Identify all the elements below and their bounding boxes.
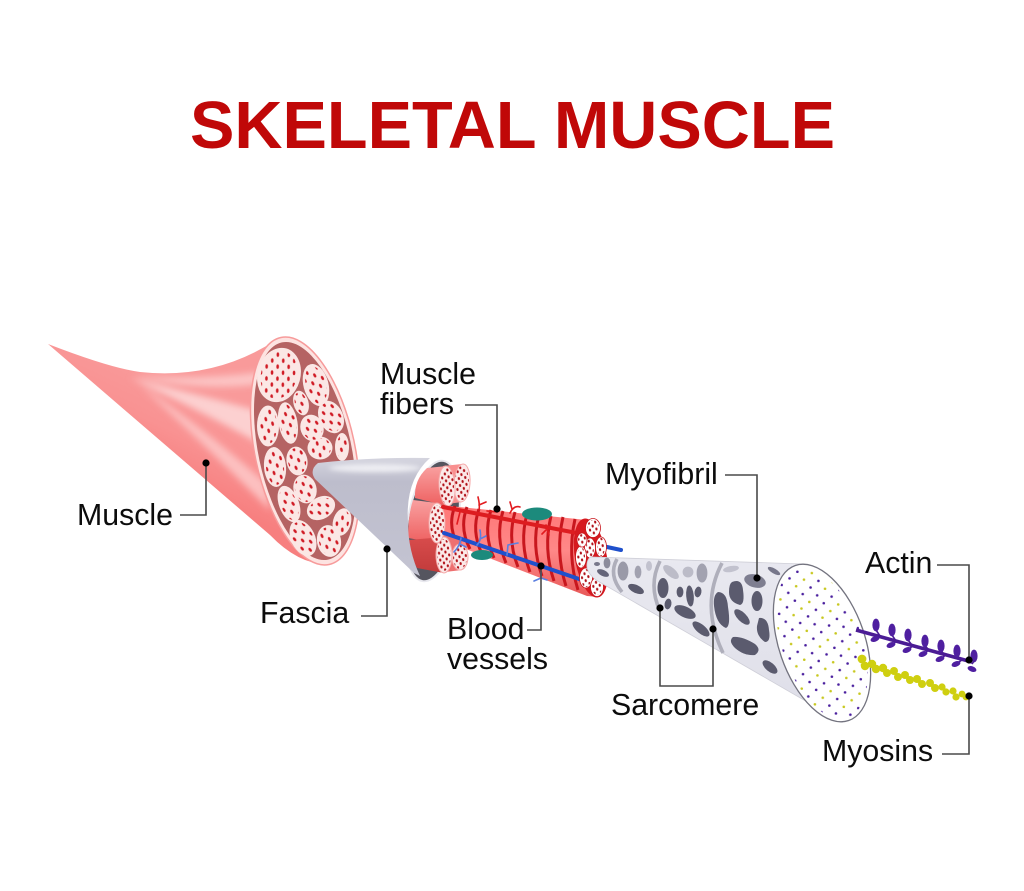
- muscle illustration: [48, 336, 358, 566]
- muscle fibers leader: [465, 405, 501, 513]
- myosin filament: [858, 655, 969, 701]
- muscle fascicles: [251, 343, 354, 560]
- label: blood vessels: Blood: [447, 613, 524, 646]
- label: muscle fibers: Muscle: [380, 358, 476, 391]
- muscle body: [48, 340, 330, 564]
- fascia highlight: [329, 464, 421, 472]
- red artery: [443, 497, 587, 535]
- sarcomere bands: [613, 559, 723, 653]
- label: myofibril: Myofibril: [605, 458, 718, 491]
- label: muscle: Muscle: [77, 499, 173, 532]
- sarcomere bracket: [656, 604, 717, 686]
- actin leader: [937, 565, 973, 664]
- title: SKELETAL MUSCLE: [190, 89, 835, 163]
- bundle dots: [430, 466, 469, 571]
- actin stems: [875, 630, 974, 664]
- actin leaves: [870, 619, 978, 673]
- bundle ends: [429, 463, 471, 573]
- label: sarcomere: Sarcomere: [611, 689, 759, 722]
- blue vein: [444, 530, 621, 581]
- myosin leader: [942, 692, 973, 754]
- green nuclei: [522, 508, 552, 520]
- blood vessels leader: [527, 562, 545, 630]
- tube stripes: [452, 506, 578, 590]
- fascia opening: [398, 457, 468, 585]
- label: actin: Actin: [865, 547, 932, 580]
- myofibril leader: [725, 475, 761, 582]
- fascicle dots: [255, 347, 352, 558]
- muscle leader: [180, 459, 210, 515]
- myofibril cross-section: [755, 551, 889, 735]
- end dots: [577, 520, 605, 595]
- fascia leader: [361, 545, 391, 616]
- myofibril illustration: [587, 551, 889, 735]
- label: blood vessels: vessels: [447, 643, 548, 676]
- myofibril holes: [594, 558, 781, 676]
- label: fascia: Fascia: [260, 597, 349, 630]
- muscle highlights: [130, 372, 270, 510]
- fiber bundles: [408, 463, 471, 573]
- leader lines: [180, 405, 973, 754]
- tube end: [568, 516, 614, 600]
- fascia cone: [313, 458, 430, 576]
- muscle cross-section: [232, 327, 378, 575]
- fascia illustration: [313, 457, 621, 600]
- label: myosins: Myosins: [822, 735, 933, 768]
- actin filament: [856, 619, 978, 673]
- label: muscle fibers: fibers: [380, 388, 454, 421]
- myofibril cone: [587, 557, 842, 722]
- muscle fiber tube: [440, 505, 600, 597]
